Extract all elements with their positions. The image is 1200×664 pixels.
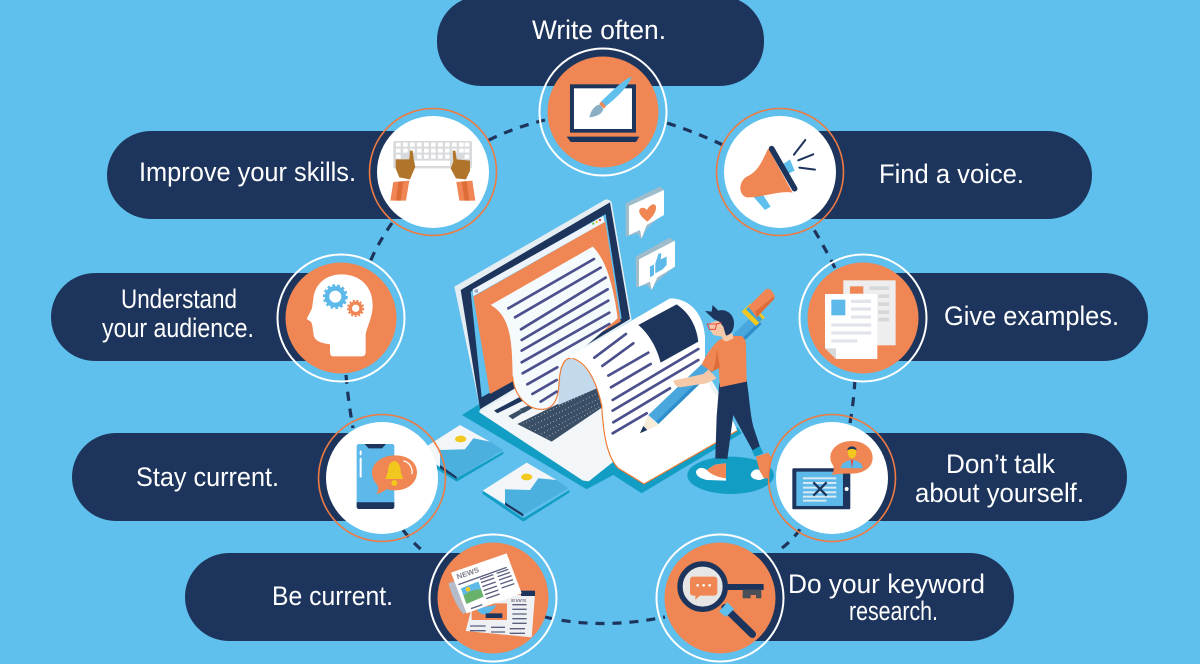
laptop base bbox=[481, 327, 710, 480]
icon node: head with gears bbox=[278, 254, 404, 382]
upper paper sheet bbox=[491, 247, 618, 409]
pill: Give examples bbox=[863, 273, 1148, 361]
pill: Improve your skills bbox=[107, 131, 433, 219]
text lines on lower sheet bbox=[594, 334, 698, 433]
laptop ground shadow bbox=[462, 402, 742, 493]
label: Don't talk about yourself: about yourself. bbox=[915, 478, 1084, 508]
central illustration: laptop, paper and writer bbox=[416, 187, 775, 522]
dark panel on paper bbox=[638, 304, 698, 363]
label: Don't talk about yourself: Don’t talk bbox=[946, 449, 1055, 479]
icon node: newspapers: NEWS bbox=[455, 565, 480, 581]
paper edge highlight bbox=[513, 358, 572, 409]
pill: Be current bbox=[185, 553, 493, 641]
pill: Find a voice bbox=[780, 131, 1092, 219]
label: Find a voice: Find a voice. bbox=[879, 159, 1024, 189]
giant pencil bbox=[640, 289, 775, 433]
writer figure bbox=[673, 305, 772, 481]
floor shadow under writer bbox=[687, 457, 774, 494]
label: Improve your skills: Improve your skills. bbox=[139, 157, 356, 187]
label: Understand your audience: your audience. bbox=[102, 313, 254, 343]
curl gap behind paper bbox=[558, 358, 601, 405]
label: Do your keyword research: research. bbox=[849, 596, 938, 626]
pill: Stay current bbox=[72, 433, 382, 521]
icon node: phone notification bbox=[318, 414, 446, 542]
pill: Understand your audience bbox=[51, 273, 341, 361]
icon node: key and magnifier bbox=[656, 534, 784, 662]
laptop screen bbox=[454, 199, 632, 412]
icon node: tablet and speech bubble bbox=[768, 414, 896, 542]
icon node: laptop and paintbrush bbox=[540, 48, 666, 176]
icon node: documents bbox=[800, 254, 926, 382]
paper underside tint bbox=[705, 373, 721, 400]
image card books bbox=[416, 425, 569, 522]
pill: Do your keyword research bbox=[720, 553, 1014, 641]
label: Be current: Be current. bbox=[272, 581, 393, 611]
heart speech bubble bbox=[626, 187, 664, 239]
label: Stay current: Stay current. bbox=[136, 462, 279, 492]
icon node: newspapers: EWS bbox=[511, 598, 527, 604]
keyboard bbox=[508, 383, 603, 442]
label: Understand your audience: Understand bbox=[121, 284, 237, 314]
lower paper sheet bbox=[568, 298, 737, 484]
thumbs-up speech bubble bbox=[636, 238, 675, 290]
icon node: megaphone bbox=[716, 108, 844, 236]
pill: Write often bbox=[437, 0, 764, 86]
pill: Don't talk about yourself bbox=[832, 433, 1127, 521]
label: Give examples: Give examples. bbox=[944, 301, 1119, 331]
dashed connecting ring bbox=[346, 120, 855, 624]
icon node: keyboard and hands bbox=[370, 108, 496, 236]
label: Write often: Write often. bbox=[532, 15, 666, 45]
icon node: newspapers bbox=[430, 534, 556, 662]
label: Do your keyword research: Do your keyword bbox=[788, 569, 985, 599]
text lines on upper sheet bbox=[508, 259, 609, 402]
